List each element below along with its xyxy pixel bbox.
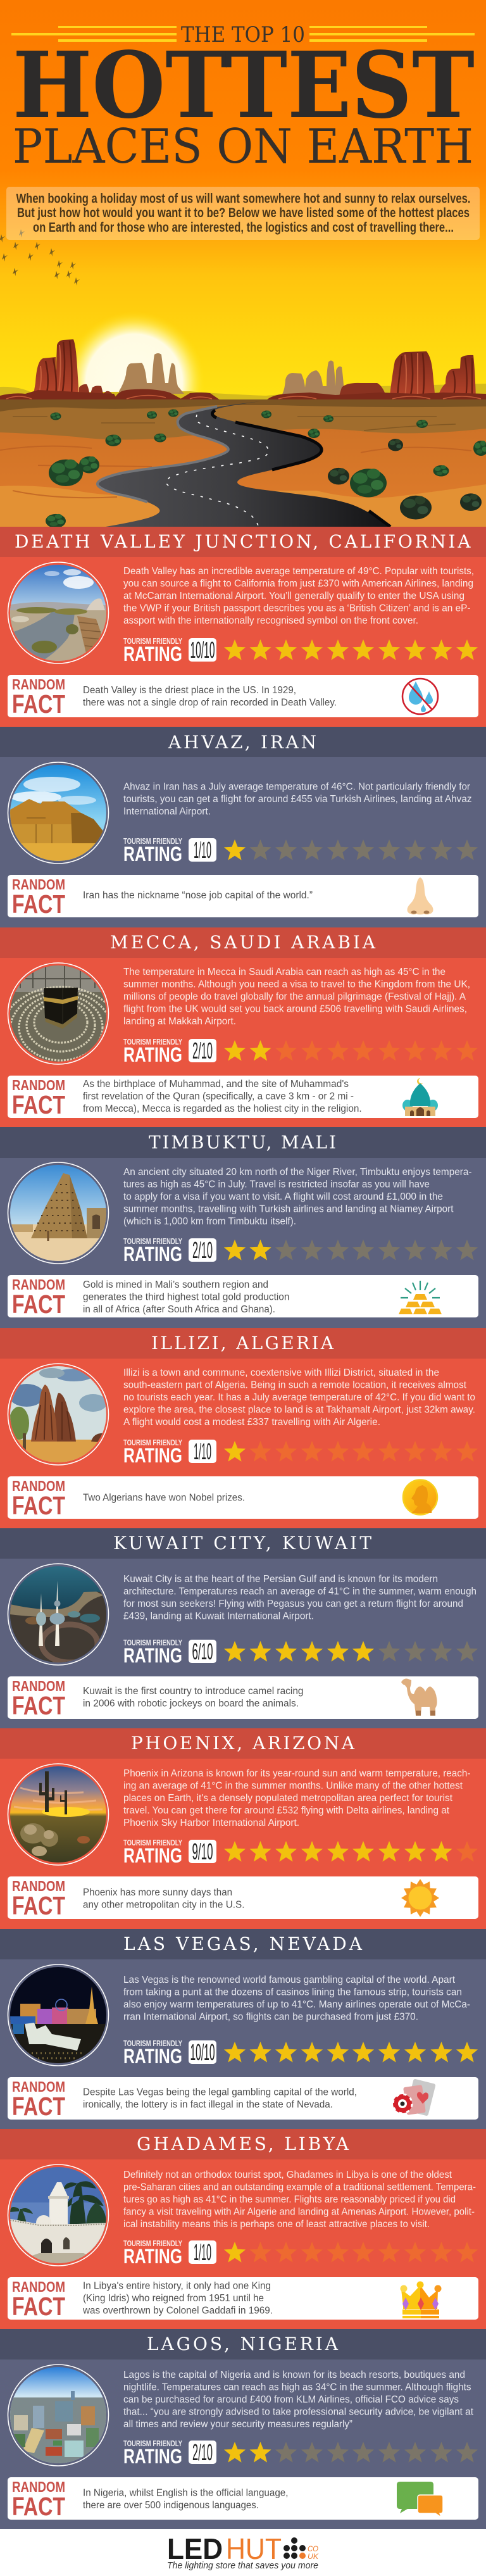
header band	[0, 927, 486, 958]
title line: the top 10: THE TOP 10	[181, 22, 305, 47]
desert bushes	[46, 410, 486, 528]
description	[123, 2170, 476, 2230]
random fact box	[8, 2077, 478, 2121]
sun	[63, 311, 205, 453]
description: Definitely not an orthodox tourist spot, Ghadames in Libya is one of the oldest	[123, 2170, 452, 2180]
description: International Airport.	[123, 806, 211, 817]
random fact box: RANDOM	[12, 1478, 65, 1494]
random fact box: Iran has the nickname “nose job capital of the world.”	[83, 890, 313, 901]
description: ing an average of 41°C in the summer months. Unlike many of the other hottest	[123, 1780, 463, 1792]
icon: cards and chip	[393, 2078, 436, 2116]
description: Illizi is a town and commune, coextensive with Illizi District, situated in the	[123, 1367, 439, 1378]
random fact box: first revelation of the Quran (specifically, a cave 3 km - or 2 mi -	[83, 1091, 354, 1102]
section: Mecca	[0, 927, 486, 1129]
description: the VWP if your British passport describes you as a ‘British Citizen’ and is an eP-	[123, 603, 471, 614]
description: also enjoy warm temperatures of up to 41°C. Many airlines operate out of McCa-	[123, 1999, 470, 2010]
description: south-eastern part of Algeria. Being in such a remote location, it receives almost	[123, 1380, 467, 1390]
tourism rating 10/10: RATING	[123, 643, 182, 665]
photo: Lagos skyline	[8, 2365, 109, 2466]
random fact box: FACT	[12, 1891, 65, 1920]
description: for most sun seekers! Flying with Pegasus you can get a return flight for around	[123, 1599, 463, 1609]
icon: speech bubbles	[397, 2482, 443, 2517]
description: Kuwait City is at the heart of the Persian Gulf and is known for its modern	[123, 1574, 438, 1585]
section: Las Vegas	[0, 1929, 486, 2130]
tourism rating 6/10: TOURISM FRIENDLY	[123, 1638, 182, 1647]
body panel	[0, 1759, 486, 1930]
random fact box	[8, 1076, 478, 1119]
description: summer months, travelling with Turkish airlines and landing at Niamey Airport	[123, 1204, 454, 1214]
tourism rating 10/10: 10/10	[190, 2039, 215, 2065]
tourism rating 1/10: RATING	[123, 1444, 182, 1467]
random fact box: In Libya's entire history, it only had one King	[83, 2281, 271, 2292]
tourism rating 2/10	[123, 1038, 478, 1066]
random fact box: Phoenix has more sunny days than	[83, 1887, 232, 1898]
description: fancy a visit traveling with Air Algerie and landing at Amenas Airport. However, polit-	[123, 2207, 475, 2217]
description: pre-Saharan cities and an outstanding example of a traditional settlement. Tempera-	[123, 2182, 476, 2193]
description: tures go as high as 41°C in the summer. Flights are reasonably priced if you did	[123, 2194, 456, 2205]
description: Lagos is the capital of Nigeria and is known for its beach resorts, boutiques and	[123, 2370, 465, 2380]
description: Ahvaz in Iran has a July average temperature of 46°C. Not particularly friendly for	[123, 781, 470, 792]
description	[123, 967, 470, 1027]
tourism rating 1/10: TOURISM FRIENDLY	[123, 2239, 182, 2248]
photo: Illizi rocks	[8, 1364, 109, 1465]
description: places on Earth, it's a densely populated metropolitan area perfect for tourist	[123, 1793, 453, 1804]
desert ground	[0, 399, 486, 527]
random fact box: RANDOM	[12, 1678, 65, 1694]
description: Las Vegas is the renowned world famous gambling capital of the world. Apart	[123, 1975, 456, 1985]
tourism rating 1/10: 1/10	[194, 837, 211, 863]
random fact box: RANDOM	[12, 676, 65, 693]
random fact box: RANDOM	[12, 2078, 65, 2095]
section: Phoenix	[0, 1728, 486, 1930]
icon: gold bars	[399, 1281, 442, 1314]
pale rocks near sun	[119, 353, 184, 394]
description: nightlife. Temperatures can reach as high as 34°C in the summer. Although flights	[123, 2382, 471, 2393]
icon: Nobel medal	[403, 1480, 437, 1514]
pale rocks on right	[280, 361, 344, 398]
tourism rating 2/10: TOURISM FRIENDLY	[123, 1237, 182, 1246]
section: Ahvaz	[0, 727, 486, 928]
tourism rating 9/10: TOURISM FRIENDLY	[123, 1838, 182, 1847]
tourism rating 6/10: 6/10	[192, 1638, 213, 1664]
tourism rating 9/10: RATING	[123, 1844, 182, 1867]
random fact box: FACT	[12, 1491, 65, 1520]
description: summer months. Although you need a visa to travel to the Kingdom from the UK,	[123, 979, 470, 990]
body panel	[0, 958, 486, 1129]
tourism rating 2/10	[123, 1237, 478, 1266]
description: landing at Makkah Airport.	[123, 1016, 236, 1027]
random fact box: RANDOM	[12, 876, 65, 893]
heading: GHADAMES, LIBYA	[137, 2133, 349, 2154]
random fact box: generates the third highest total gold production	[83, 1291, 290, 1303]
description: at McCarran International Airport. You’ll generally qualify to enter the USA using	[123, 591, 464, 601]
photo: Death Valley	[8, 562, 109, 663]
random fact box: there are over 500 indigenous languages.	[83, 2500, 259, 2511]
random fact box: FACT	[12, 689, 65, 719]
photo: Phoenix sunset cacti	[8, 1764, 109, 1865]
photo: Timbuktu mosque	[8, 1162, 109, 1264]
logo domain: UK	[308, 2552, 319, 2561]
body panel	[0, 1158, 486, 1329]
tourism rating 10/10: TOURISM FRIENDLY	[123, 2039, 182, 2048]
tourism rating 2/10: 2/10	[192, 1038, 213, 1064]
description	[123, 781, 472, 817]
body panel	[0, 1359, 486, 1530]
header band	[0, 1528, 486, 1559]
random fact box	[8, 2477, 478, 2521]
description	[123, 2370, 474, 2430]
random fact box: was overthrown by Colonel Gaddafi in 1969.	[82, 2306, 273, 2316]
tourism rating 2/10: RATING	[123, 2445, 182, 2468]
section: Death Valley Junction	[0, 527, 486, 728]
tourism rating 2/10: TOURISM FRIENDLY	[123, 2439, 182, 2448]
photo: Ahvaz ziggurat	[8, 762, 109, 864]
description: tourists, you can get a flight for around £455 via Turkish Airlines, landing at Ahvaz	[123, 794, 472, 805]
body panel	[0, 1559, 486, 1730]
random fact box: In Nigeria, whilst English is the official language,	[83, 2488, 289, 2499]
description: travel. You can get there for around £532 flying with Delta airlines, landing at	[123, 1806, 450, 1816]
tourism rating 10/10: TOURISM FRIENDLY	[123, 637, 182, 646]
header band	[0, 1127, 486, 1158]
section: Timbuktu	[0, 1127, 486, 1329]
photo: Ghadames old town	[8, 2164, 109, 2266]
random fact box: Despite Las Vegas being the legal gambling capital of the world,	[83, 2087, 357, 2098]
tourism rating 6/10: RATING	[123, 1644, 182, 1667]
flock of birds	[0, 229, 80, 286]
logo tagline: The lighting store that saves you more	[167, 2560, 318, 2571]
description: all times and review your security measures regularly”	[123, 2419, 352, 2430]
title rules	[11, 26, 475, 42]
random fact box: Kuwait is the first country to introduce camel racing	[83, 1686, 304, 1697]
footer logo	[167, 2532, 319, 2571]
random fact box: FACT	[12, 889, 65, 919]
heading: ILLIZI, ALGERIA	[151, 1333, 334, 1354]
random fact box	[8, 675, 478, 719]
description: to apply for a visa if you want to visit. A flight will cost around £1,000 in the	[123, 1191, 443, 1202]
description: flight from the UK would set you back around £506 travelling with Saudi Airlines,	[123, 1004, 467, 1014]
description: can be purchased for around £400 from KLM Airlines, official FCO advice says	[123, 2394, 459, 2405]
description	[123, 1975, 470, 2022]
left mesa rock	[0, 339, 220, 400]
random fact box: FACT	[12, 2492, 65, 2521]
tourism rating 1/10	[123, 837, 478, 865]
header band	[0, 1728, 486, 1759]
random fact box	[8, 1676, 478, 1720]
random fact box: (King Idris) who reigned from 1951 until he	[83, 2293, 264, 2304]
random fact box: any other metropolitan city in the U.S.	[83, 1899, 244, 1911]
description: Phoenix in Arizona is known for its year-round sun and warm temperature, reach-	[123, 1768, 471, 1779]
header band	[0, 2129, 486, 2159]
tourism rating 9/10	[123, 1838, 478, 1867]
heading: MECCA, SAUDI ARABIA	[110, 932, 376, 953]
description: you can source a flight to California from just £370 with American Airlines, landing	[123, 579, 473, 589]
description: from taking a punt at the dozens of casinos lining the famous strip, tourists can	[123, 1987, 462, 1998]
body panel	[0, 2359, 486, 2529]
description: ical instability means this is perhaps one of least attractive places to visit.	[123, 2219, 430, 2230]
photo: Las Vegas strip	[8, 1964, 109, 2066]
tourism rating 2/10: RATING	[123, 1243, 182, 1266]
winding road	[97, 401, 390, 527]
body panel	[0, 2159, 486, 2330]
tourism rating 6/10	[123, 1638, 478, 1667]
heading: LAGOS, NIGERIA	[147, 2334, 339, 2354]
description: Death Valley has an incredible average temperature of 49°C. Popular with tourists,	[123, 566, 474, 577]
random fact box: in 2006 with robotic jockeys on board the animals.	[83, 1698, 299, 1709]
description: Phoenix Sky Harbor International Airport.	[123, 1818, 299, 1828]
description	[123, 1574, 477, 1622]
tourism rating 10/10	[123, 637, 478, 665]
photo: Kuwait towers	[8, 1564, 109, 1665]
tourism rating 9/10: 9/10	[192, 1838, 213, 1864]
description	[123, 1167, 472, 1227]
description: no tourists each year. It has a July average temperature of 42°C. If you did want to	[123, 1392, 475, 1403]
random fact box: there was not a single drop of rain recorded in Death Valley.	[83, 698, 337, 708]
hero: sky and desert illustration	[0, 0, 486, 528]
logo wordmark HUT: HUT	[226, 2532, 282, 2565]
section: Ghadames	[0, 2129, 486, 2330]
random fact box: FACT	[12, 2292, 65, 2321]
random fact box	[8, 2277, 478, 2321]
description: £439, landing at Kuwait International Airport.	[123, 1611, 314, 1622]
description: millions of people do travel globally for the annual pilgrimage (Festival of Hajj). A	[123, 991, 466, 1002]
header band	[0, 1929, 486, 1959]
description: An ancient city situated 20 km north of the Niger River, Timbuktu enjoys tempera-	[123, 1167, 472, 1178]
random fact box: RANDOM	[12, 1077, 65, 1093]
tourism rating 10/10: 10/10	[190, 637, 215, 663]
random fact box: FACT	[12, 1290, 65, 1319]
random fact box	[8, 1275, 478, 1319]
tourism rating 2/10: 2/10	[192, 2439, 213, 2465]
heading: DEATH VALLEY JUNCTION, CALIFORNIA	[15, 531, 471, 552]
body panel	[0, 1959, 486, 2130]
random fact box: RANDOM	[12, 1276, 65, 1293]
random fact box	[8, 1476, 478, 1520]
body panel	[0, 757, 486, 928]
icon: camel	[401, 1679, 437, 1716]
tourism rating 1/10: TOURISM FRIENDLY	[123, 837, 182, 846]
logo domain: CO	[308, 2544, 318, 2553]
icon: sun	[401, 1879, 439, 1917]
description: explore the area, the closest place to land is at Takhamalt Airport, just 32km away.	[123, 1404, 475, 1416]
random fact box	[8, 875, 478, 919]
random fact box	[8, 1876, 478, 1920]
tourism rating 1/10: RATING	[123, 843, 182, 865]
description	[123, 1367, 475, 1428]
random fact box: RANDOM	[12, 1878, 65, 1894]
description: assport with the internationally recognised symbol on the front cover.	[123, 615, 418, 626]
title block	[11, 22, 475, 174]
intro panel	[6, 187, 480, 240]
random fact box: from Mecca), Mecca is regarded as the holiest city in the religion.	[83, 1103, 362, 1114]
heading: PHOENIX, ARIZONA	[131, 1733, 355, 1754]
description	[123, 566, 474, 626]
section: Lagos	[0, 2329, 486, 2529]
header band	[0, 1328, 486, 1359]
icon: no rain	[402, 679, 438, 714]
icon: mosque	[402, 1078, 438, 1116]
tourism rating 1/10: TOURISM FRIENDLY	[123, 1438, 182, 1447]
tourism rating 2/10	[123, 2439, 478, 2468]
description: A flight would cost a modest £337 travelling with Air Algerie.	[123, 1417, 380, 1428]
logo domain	[308, 2544, 319, 2561]
random fact box: FACT	[12, 1090, 65, 1119]
random fact box: in all of Africa (after South Africa and Ghana).	[83, 1304, 275, 1315]
header band	[0, 2329, 486, 2359]
icon: crown	[400, 2282, 442, 2318]
description: that... “you are strongly advised to take professional security advice, be vigilant at	[123, 2407, 474, 2417]
header band	[0, 527, 486, 557]
body panel	[0, 557, 486, 728]
tourism rating 10/10: RATING	[123, 2045, 182, 2068]
random fact box: Death Valley is the driest place in the US. In 1929,	[83, 685, 296, 696]
tourism rating 2/10: RATING	[123, 1043, 182, 1066]
icon: nose	[408, 877, 433, 914]
random fact box: RANDOM	[12, 2479, 65, 2495]
section: Kuwait City	[0, 1528, 486, 1730]
logo wordmark LED: LED	[167, 2532, 223, 2565]
tourism rating 1/10	[123, 2239, 478, 2268]
right mesa rocks	[266, 351, 486, 400]
distant hills	[0, 384, 486, 402]
random fact box: RANDOM	[12, 2278, 65, 2295]
heading: KUWAIT CITY, KUWAIT	[113, 1533, 371, 1554]
description: The temperature in Mecca in Saudi Arabia can reach as high as 45°C in the	[123, 967, 446, 977]
random fact box: As the birthplace of Muhammad, and the site of Muhammad's	[83, 1079, 349, 1090]
tourism rating 1/10: RATING	[123, 2245, 182, 2268]
random fact box: FACT	[12, 2092, 65, 2121]
tourism rating 2/10: TOURISM FRIENDLY	[123, 1038, 182, 1046]
tourism rating 10/10	[123, 2039, 478, 2068]
tourism rating 2/10: 2/10	[192, 1237, 213, 1263]
random fact box: ironically, the lottery is in fact illegal in the state of Nevada.	[83, 2099, 333, 2110]
logo dots	[284, 2537, 306, 2559]
section: Illizi	[0, 1328, 486, 1530]
random fact box: FACT	[12, 1691, 65, 1720]
description: (which is 1,000 km from Timbuktu itself).	[123, 1216, 296, 1227]
heading: AHVAZ, IRAN	[168, 732, 316, 753]
header band	[0, 727, 486, 757]
description: tures as high as 45°C in July. Travel is restricted insofar as you will have	[123, 1179, 430, 1190]
description	[123, 1768, 471, 1828]
photo: Kaaba	[8, 962, 109, 1065]
random fact box: Two Algerians have won Nobel prizes.	[83, 1493, 245, 1504]
description: architecture. Temperatures reach an average of 41°C in the summer, warm enough	[123, 1586, 477, 1597]
random fact box: Gold is mined in Mali’s southern region and	[83, 1279, 268, 1290]
tourism rating 1/10	[123, 1438, 478, 1467]
tourism rating 1/10: 1/10	[194, 1438, 211, 1464]
heading: LAS VEGAS, NEVADA	[123, 1933, 363, 1954]
heading: TIMBUKTU, MALI	[149, 1132, 336, 1153]
description: rran International Airport, so flights can be purchased from just £370.	[123, 2012, 418, 2022]
tourism rating 1/10: 1/10	[194, 2239, 211, 2265]
